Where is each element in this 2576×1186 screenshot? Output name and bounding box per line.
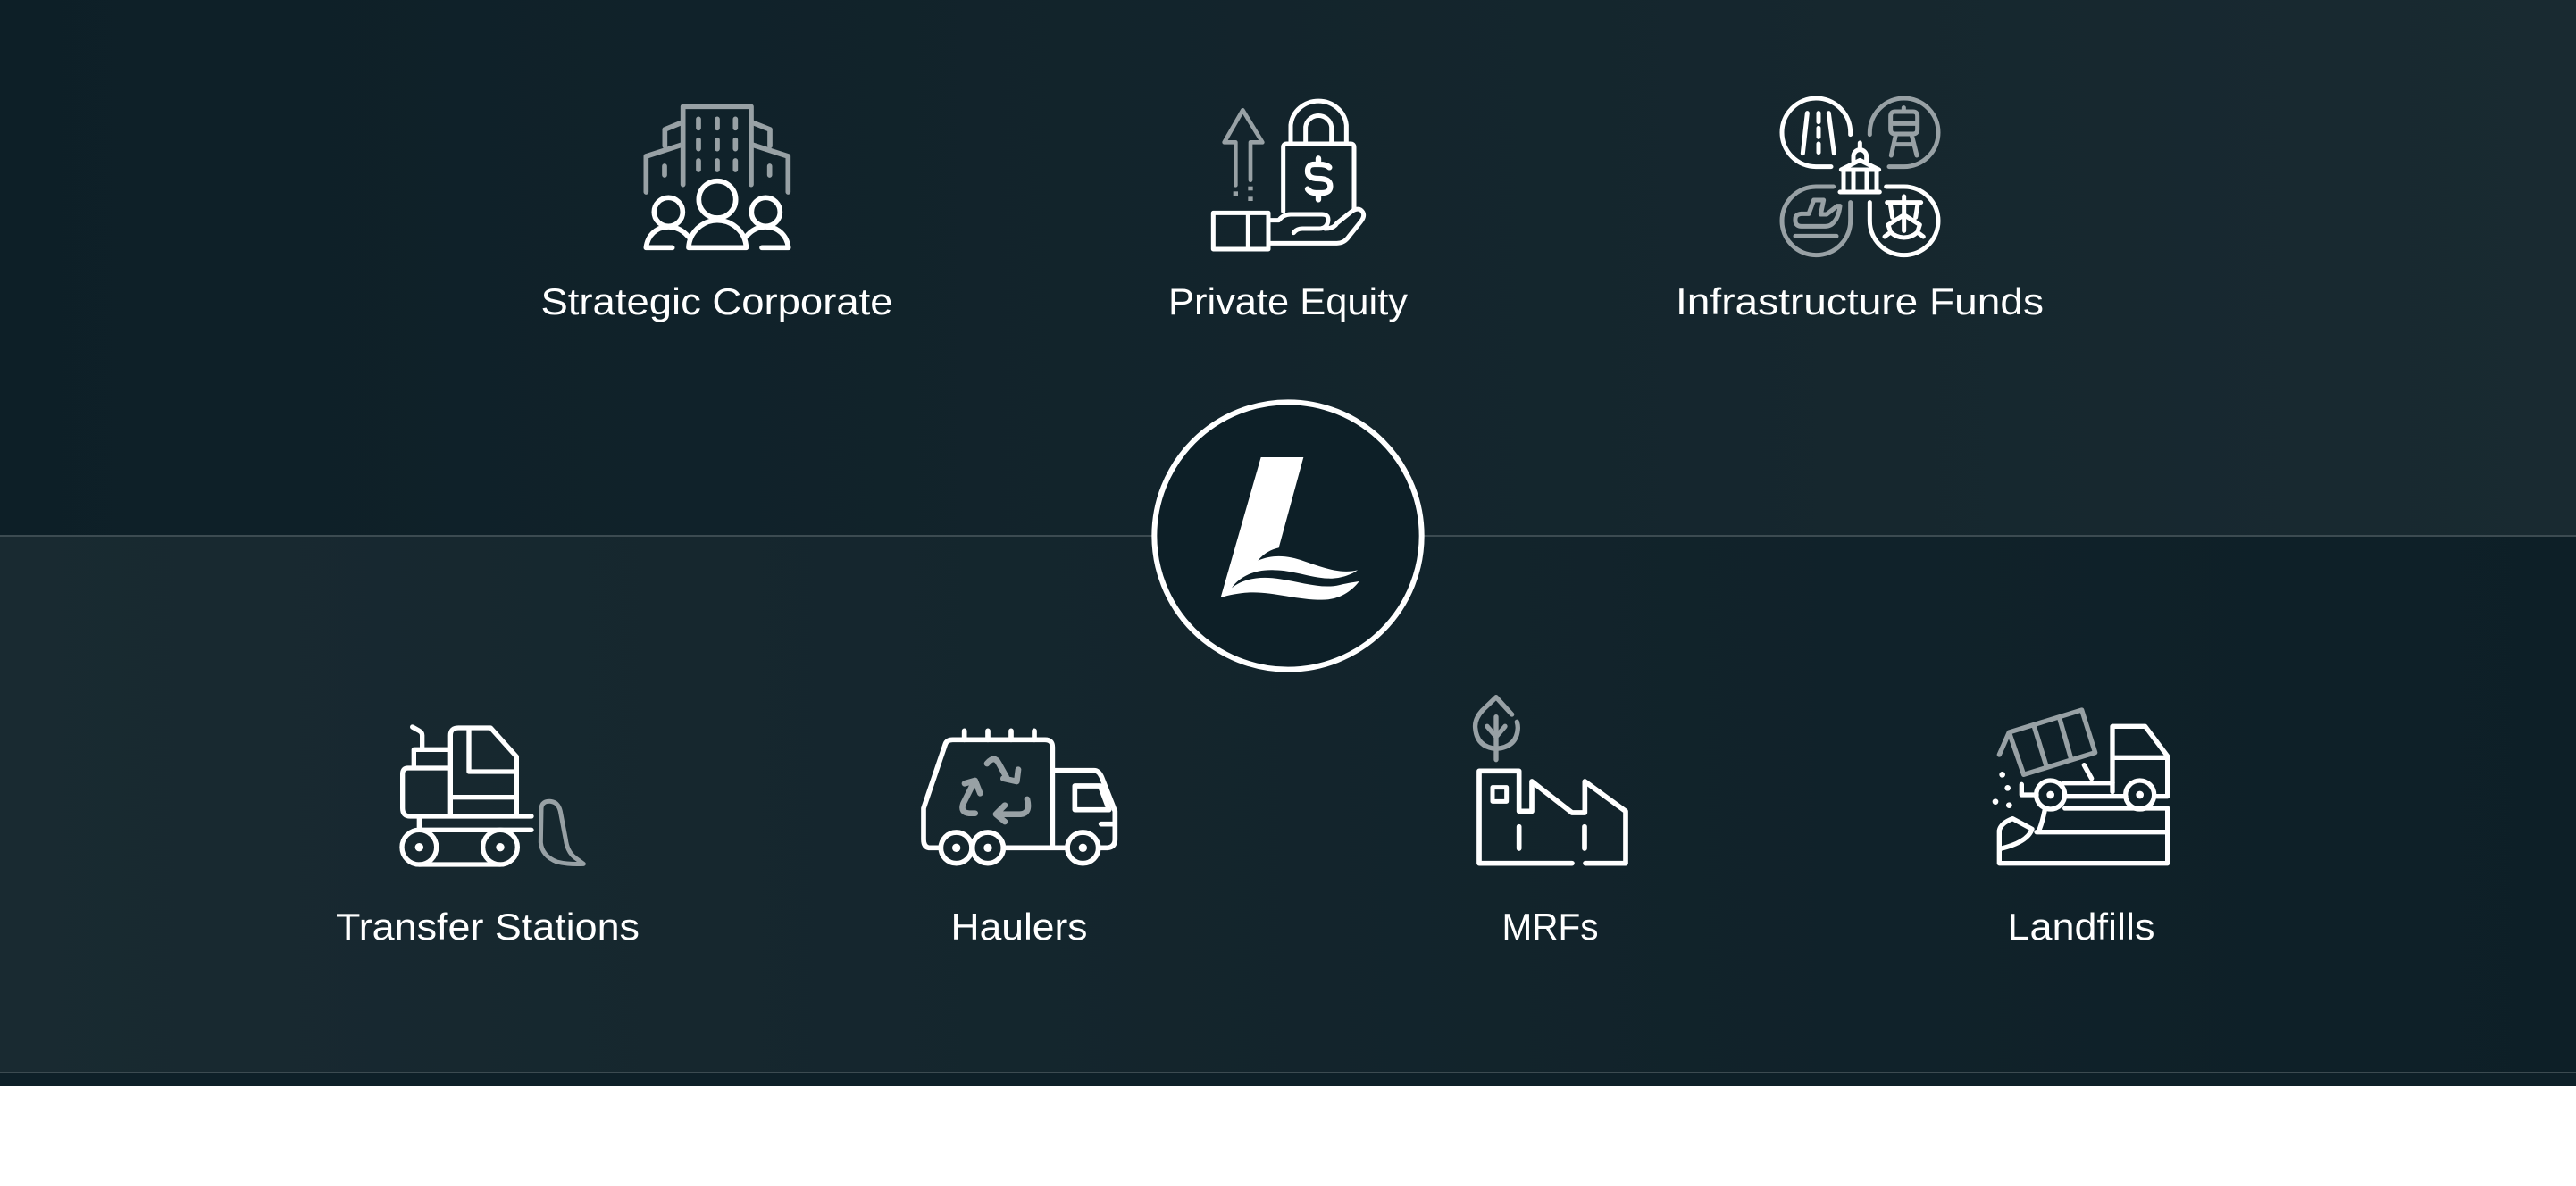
icon: haulers bbox=[924, 731, 1115, 864]
label: Landfills: Landfills bbox=[2008, 906, 2154, 948]
icon: private equity bbox=[1213, 101, 1364, 249]
label: Transfer Stations: Transfer Stations bbox=[336, 906, 640, 948]
bottom band bbox=[0, 1072, 2576, 1086]
label: MRFs: MRFs bbox=[1502, 906, 1599, 948]
icon: landfills bbox=[1993, 710, 2168, 864]
icon: infrastructure funds bbox=[1782, 98, 1938, 255]
label: Haulers: Haulers bbox=[950, 906, 1088, 948]
panel: operators background bbox=[0, 536, 2576, 1072]
icon: strategic corporate bbox=[646, 106, 789, 247]
icon: transfer stations bbox=[402, 727, 583, 864]
label: Private Equity: Private Equity bbox=[1168, 280, 1408, 322]
label: Infrastructure Funds: Infrastructure Funds bbox=[1676, 280, 2044, 322]
panel: buyers background bbox=[0, 0, 2576, 536]
label: Strategic Corporate: Strategic Corporate bbox=[541, 280, 893, 322]
logo: L badge bbox=[1154, 402, 1422, 670]
icon: MRFs bbox=[1476, 697, 1626, 864]
